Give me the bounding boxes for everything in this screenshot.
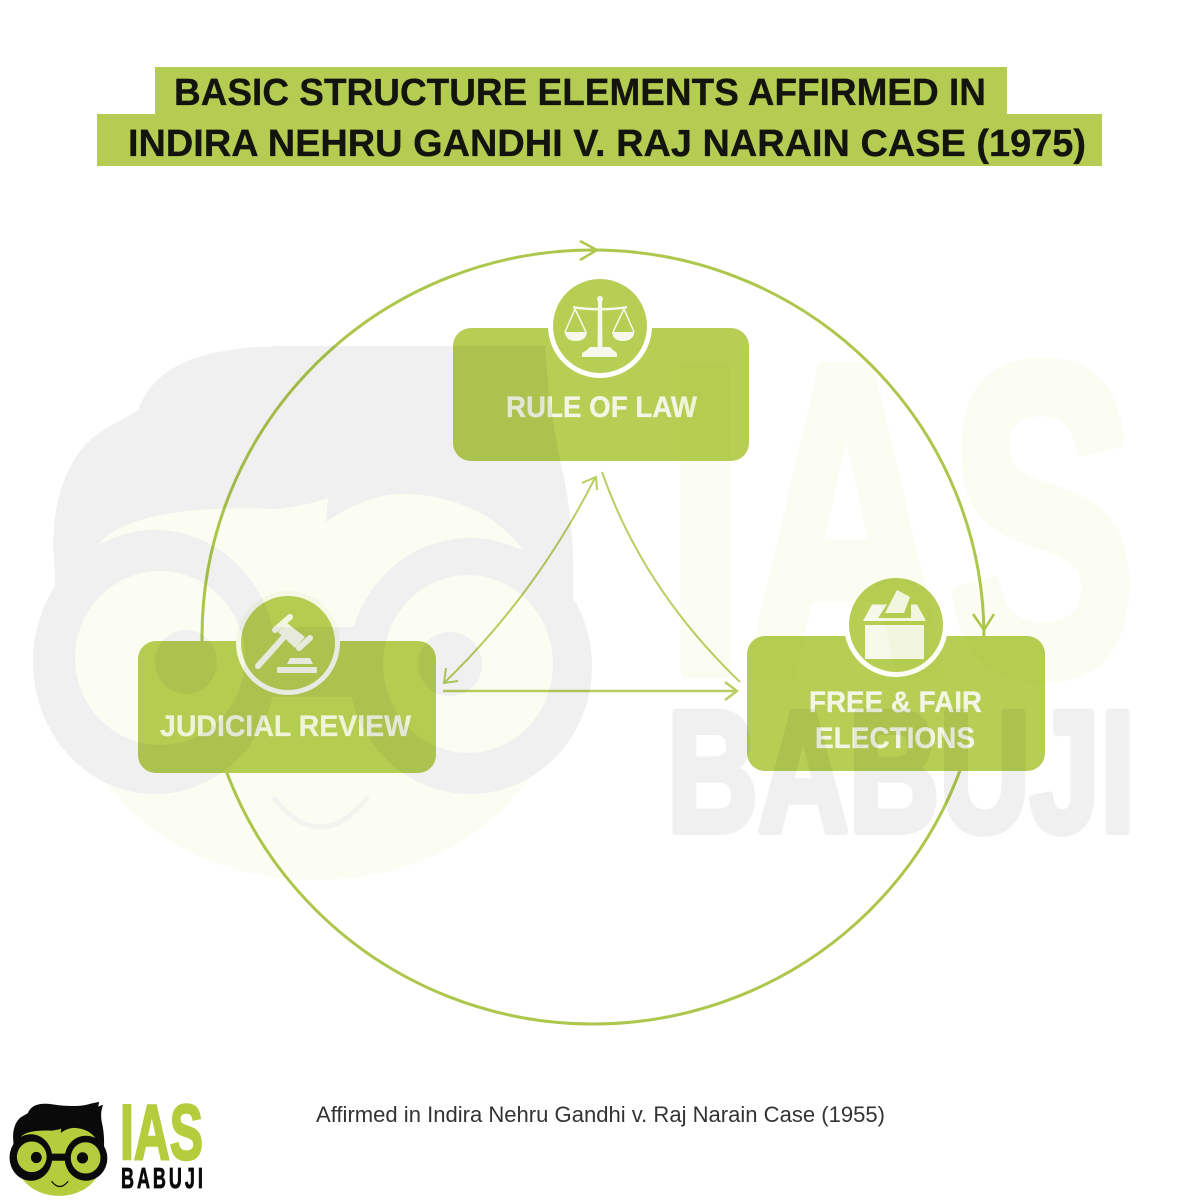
arrow: judicial review to free and fair elections xyxy=(443,682,737,700)
title xyxy=(97,67,1102,166)
watermark mascot xyxy=(33,346,592,880)
footer caption: Affirmed in Indira Nehru Gandhi v. Raj Narain Case (1955) xyxy=(316,1102,885,1127)
label: rule of law: RULE OF LAW xyxy=(506,391,698,424)
logo wordmark: IAS xyxy=(120,1088,203,1176)
panel: free and fair elections xyxy=(747,573,1045,771)
icon: gavel xyxy=(258,617,317,673)
arrow: rule of law to free and fair elections xyxy=(602,472,740,682)
logo wordmark: BABUJI xyxy=(121,1163,203,1195)
panel: judicial review xyxy=(138,591,436,773)
icon: mascot head xyxy=(10,1102,107,1196)
title: BASIC STRUCTURE ELEMENTS AFFIRMED IN xyxy=(174,72,986,114)
label: judicial review: JUDICIAL REVIEW xyxy=(160,710,412,743)
logo: IAS Babuji xyxy=(10,1088,203,1196)
watermark: logo xyxy=(33,275,1136,880)
label: free and fair elections: FREE & FAIR xyxy=(809,686,982,719)
title: INDIRA NEHRU GANDHI V. RAJ NARAIN CASE (1975) xyxy=(128,123,1086,165)
panel: rule of law xyxy=(453,274,749,461)
label: free and fair elections: ELECTIONS xyxy=(815,722,975,755)
arrow: judicial review and rule of law xyxy=(444,477,597,683)
logo wordmark xyxy=(120,1088,203,1195)
icon: ballot box xyxy=(863,590,926,659)
label: free and fair elections xyxy=(809,686,982,755)
icon: scales of justice xyxy=(564,296,634,357)
outer cycle ring with arrows xyxy=(202,241,994,1024)
